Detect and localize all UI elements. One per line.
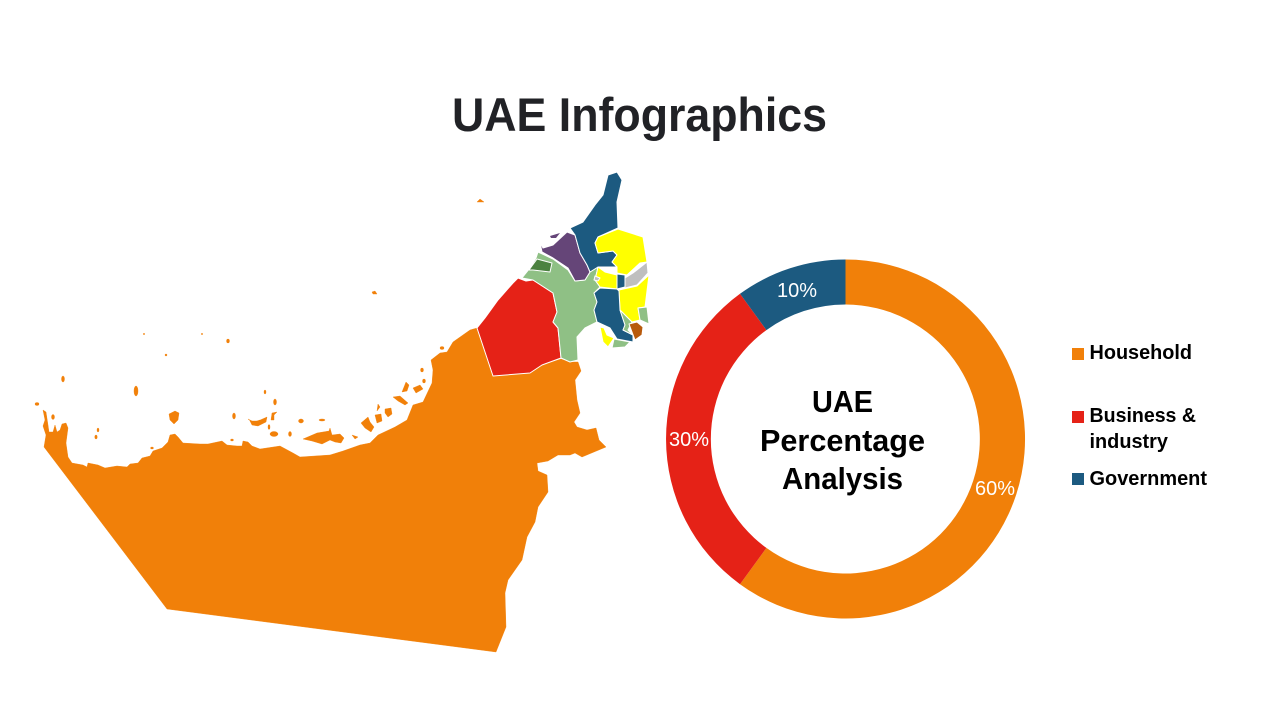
donut chart — [666, 260, 1025, 618]
map region: Abu Dhabi with islands — [35, 199, 606, 652]
region: southern blue — [594, 288, 633, 342]
region: small grey — [594, 276, 600, 281]
region: grey — [625, 262, 648, 288]
donut centre heading: Analysis — [782, 461, 903, 496]
donut label 30%: 30% — [669, 429, 709, 451]
region: southern green — [612, 339, 630, 348]
region: eastern green — [638, 307, 649, 324]
legend item: government: Government — [1090, 468, 1207, 490]
region: southern yellow — [600, 327, 614, 347]
donut centre heading: UAE — [812, 384, 873, 419]
region: Fujairah yellow — [595, 229, 647, 275]
map of the UAE — [35, 172, 649, 652]
donut segment: government 10% — [740, 260, 846, 330]
region: Umm Al Quwain purple — [540, 232, 590, 281]
legend — [1072, 342, 1207, 490]
region: brown — [629, 322, 643, 340]
region: Dubai red — [477, 278, 561, 376]
map regions: northern emirates — [477, 172, 649, 376]
region: small green — [620, 310, 633, 335]
legend item: business and industry: Business & — [1090, 405, 1196, 427]
title: UAE Infographics — [452, 88, 827, 141]
region: Ajman dark green — [529, 259, 552, 272]
legend item: business and industry — [1072, 405, 1196, 453]
donut centre heading: Percentage — [760, 423, 925, 458]
legend item: business and industry: industry — [1090, 431, 1169, 453]
region: central yellow — [595, 267, 623, 289]
legend item: household: Household — [1090, 342, 1192, 364]
donut label 10%: 10% — [777, 280, 817, 302]
region: Sharjah green — [522, 252, 600, 362]
donut segment: household 60% — [740, 260, 1025, 618]
donut centre heading — [760, 384, 925, 496]
region: central blue — [617, 274, 625, 289]
region: Ras Al Khaimah north blue — [570, 172, 622, 272]
island fragment purple — [550, 233, 560, 238]
donut segment: business and industry 30% — [666, 294, 766, 584]
region: eastern yellow — [619, 275, 649, 322]
donut label 60%: 60% — [975, 478, 1015, 500]
